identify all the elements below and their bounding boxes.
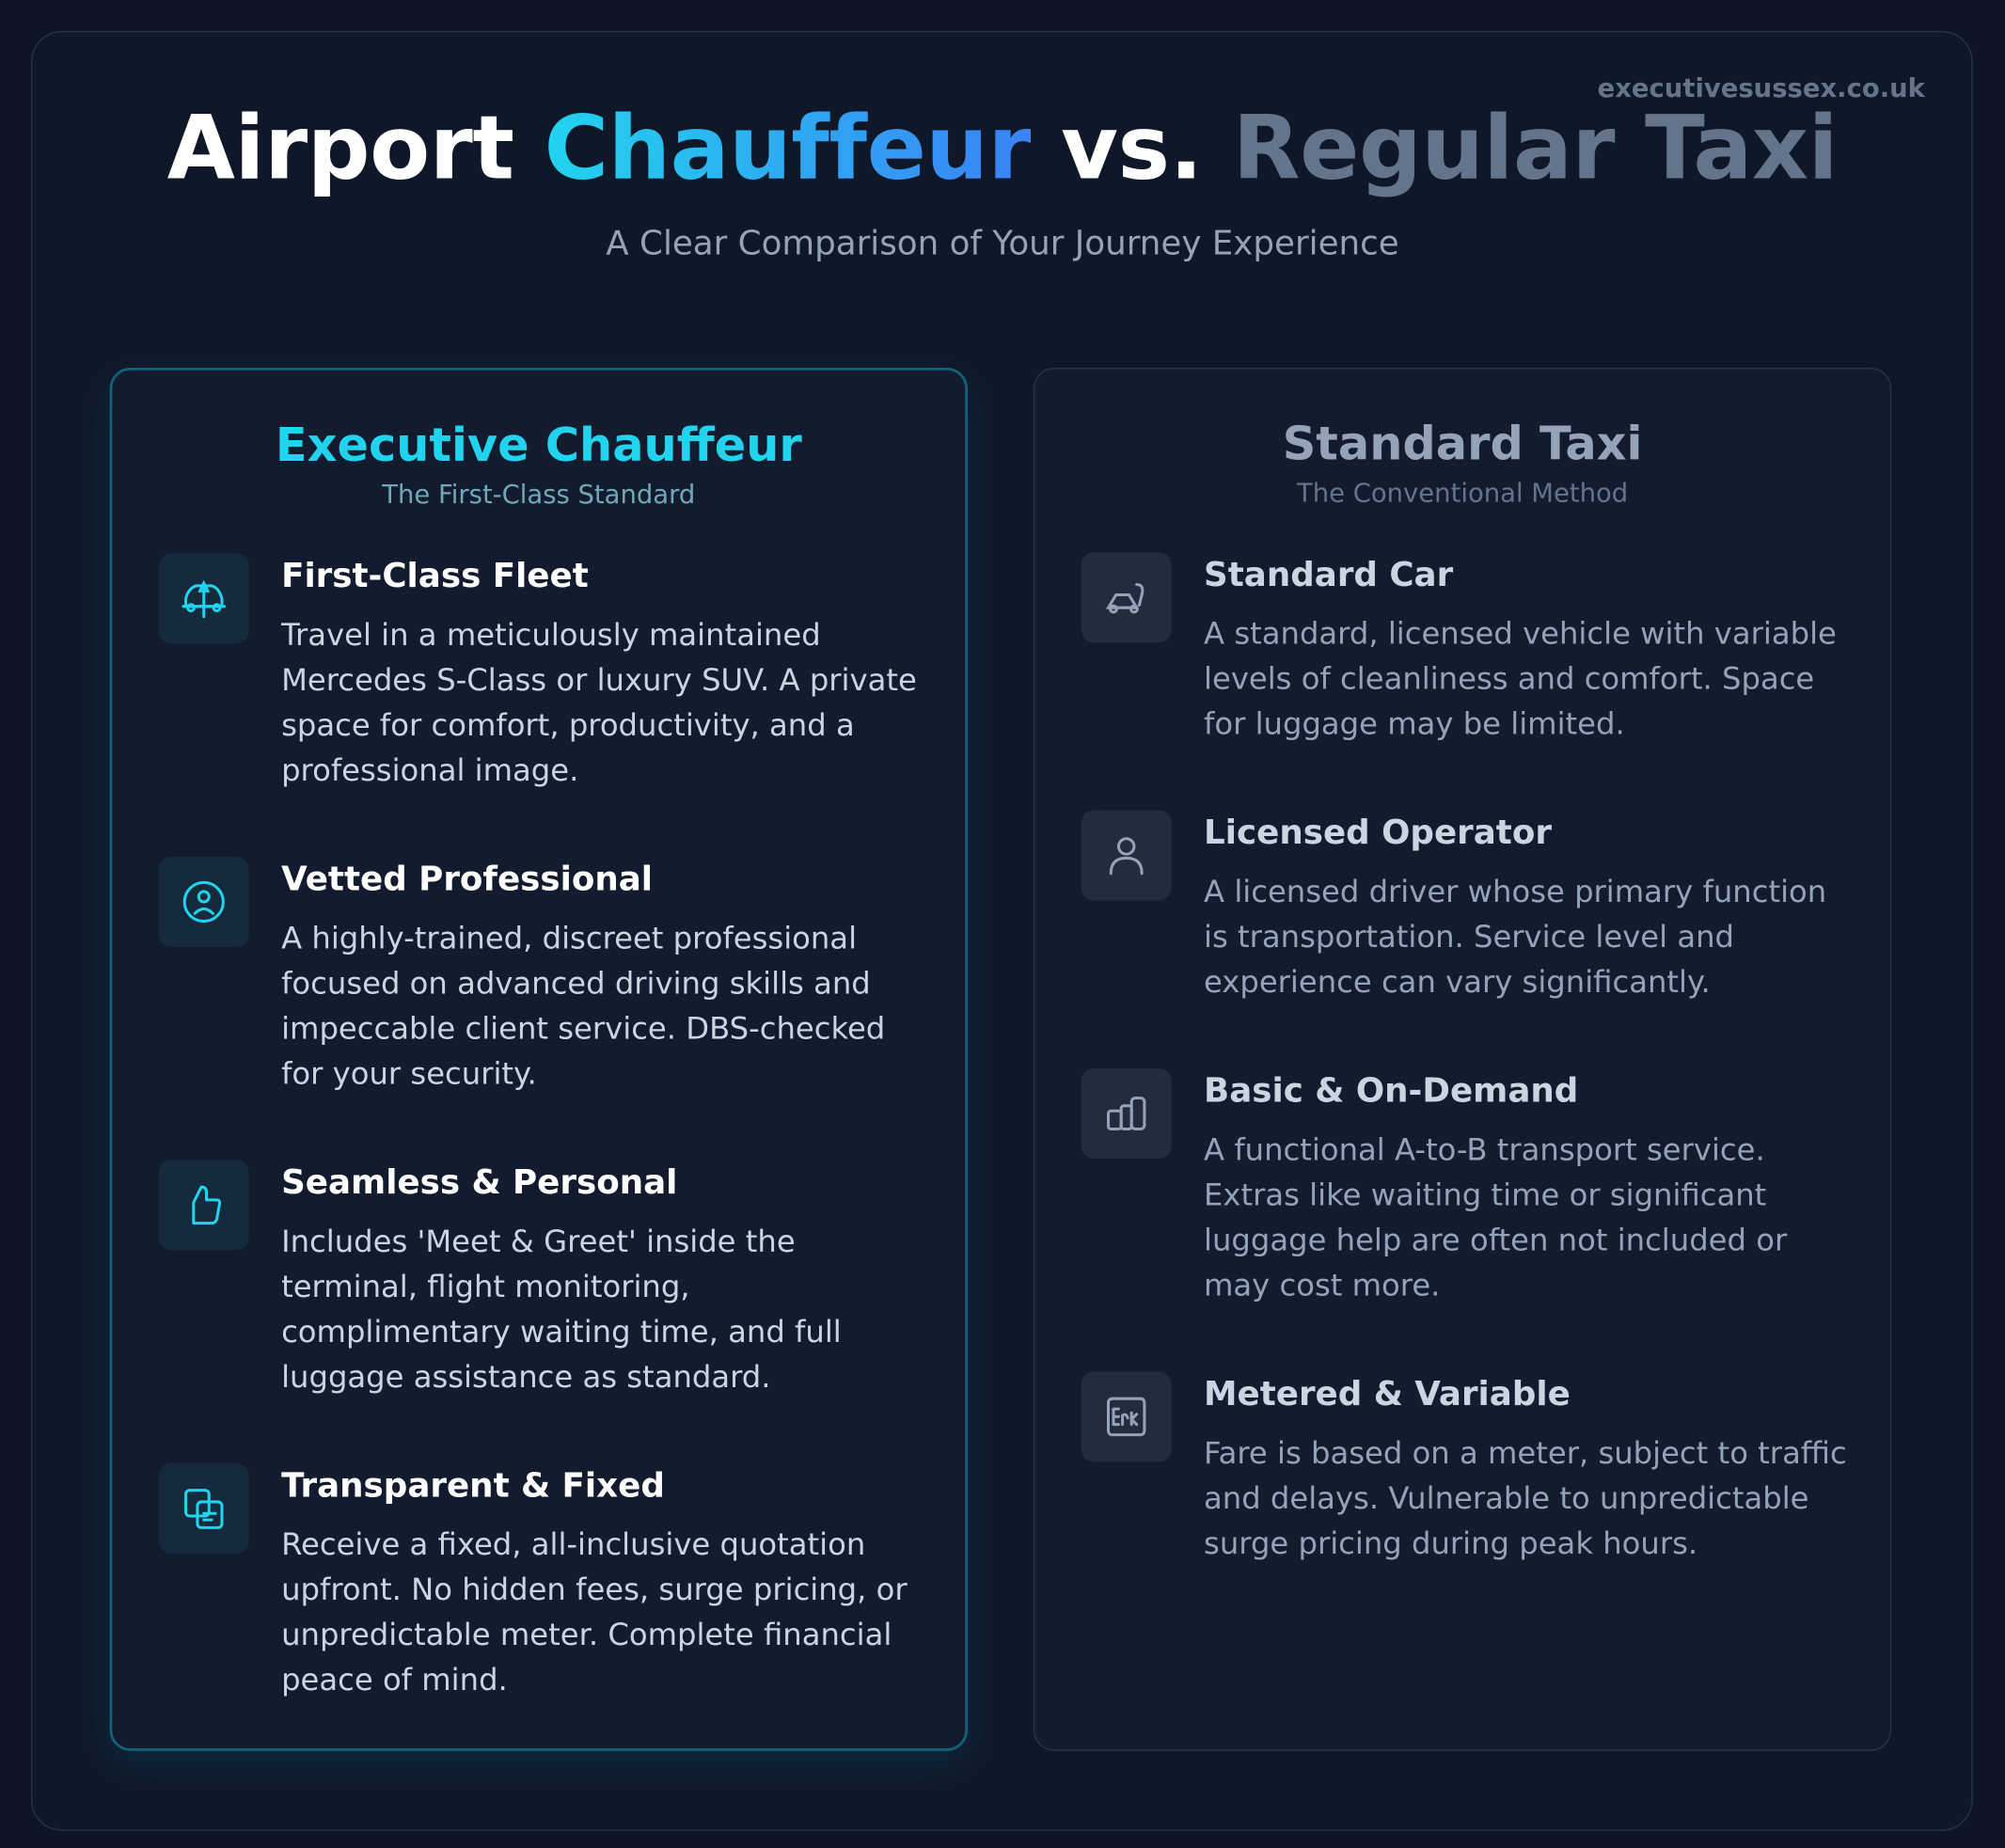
- item: transparent & fixed: [159, 1463, 908, 1698]
- panel heading: Standard Taxi: [1283, 419, 1642, 471]
- item: licensed operator: Licensed Operator: [1204, 814, 1552, 853]
- icon: car: [1081, 552, 1172, 642]
- item: metered & variable: Fare is based on a meter, subject to traffic and delays. Vulnerable to unpredictable surge pricing during peak hours.: [1204, 1435, 1847, 1561]
- item: standard car: Standard Car: [1204, 556, 1453, 594]
- item: vetted professional: A highly-trained, discreet professional focused on advanced driving skills and impeccable client service. DBS-checked for your security.: [281, 920, 885, 1092]
- item: vetted professional: Vetted Professional: [281, 861, 653, 899]
- icon: meter: [1081, 1371, 1172, 1461]
- panel heading: Executive Chauffeur: [276, 419, 802, 472]
- icon: person badge: [159, 857, 249, 947]
- title: Airport Chauffeur vs. Regular Taxi: [167, 98, 1838, 200]
- panel subheading: The Conventional Method: [1297, 478, 1628, 509]
- icon: thumbs up: [159, 1160, 249, 1250]
- item: licensed operator: [1081, 811, 1826, 1000]
- icon: buildings: [1081, 1068, 1172, 1159]
- icon: person: [1081, 811, 1172, 901]
- icon: documents: [159, 1463, 249, 1554]
- panel subheading: The First-Class Standard: [382, 479, 695, 510]
- item: first-class fleet: [159, 553, 917, 788]
- item: seamless & personal: Seamless & Personal: [281, 1163, 677, 1203]
- item: basic & on-demand: [1081, 1068, 1787, 1303]
- item: first-class fleet: Travel in a meticulously maintained Mercedes S-Class or luxury SUV. A private space for comfort, productivity, and a professional image.: [281, 617, 917, 788]
- item: basic & on-demand: A functional A-to-B transport service. Extras like waiting time or significant luggage help are often not included or may cost more.: [1204, 1131, 1787, 1303]
- item: seamless & personal: Includes 'Meet & Greet' inside the terminal, flight monitoring, complimentary waiting time, and full luggage assistance as standard.: [281, 1224, 842, 1395]
- item: metered & variable: [1081, 1371, 1847, 1561]
- item: basic & on-demand: Basic & On-Demand: [1204, 1072, 1578, 1111]
- item: first-class fleet: First-Class Fleet: [281, 558, 589, 596]
- website url: executivesussex.co.uk: [1598, 72, 1925, 103]
- item: vetted professional: [159, 857, 885, 1092]
- item: transparent & fixed: Transparent & Fixed: [281, 1467, 665, 1506]
- icon: car: [159, 554, 249, 644]
- panel: standard taxi: [1034, 368, 1891, 1751]
- item: transparent & fixed: Receive a fixed, all-inclusive quotation upfront. No hidden fees, surge pricing, or unpredictable meter. Complete financial peace of mind.: [281, 1526, 908, 1698]
- panel: executive chauffeur: [110, 368, 968, 1751]
- item: standard car: A standard, licensed vehicle with variable levels of cleanliness and comfort. Space for luggage may be limited.: [1204, 615, 1837, 742]
- item: standard car: [1081, 553, 1837, 742]
- item: metered & variable: Metered & Variable: [1204, 1375, 1571, 1414]
- subtitle: A Clear Comparison of Your Journey Experience: [606, 225, 1399, 263]
- item: licensed operator: A licensed driver whose primary function is transportation. Service level and experience can vary significantly.: [1204, 874, 1826, 1000]
- item: seamless & personal: [159, 1161, 842, 1395]
